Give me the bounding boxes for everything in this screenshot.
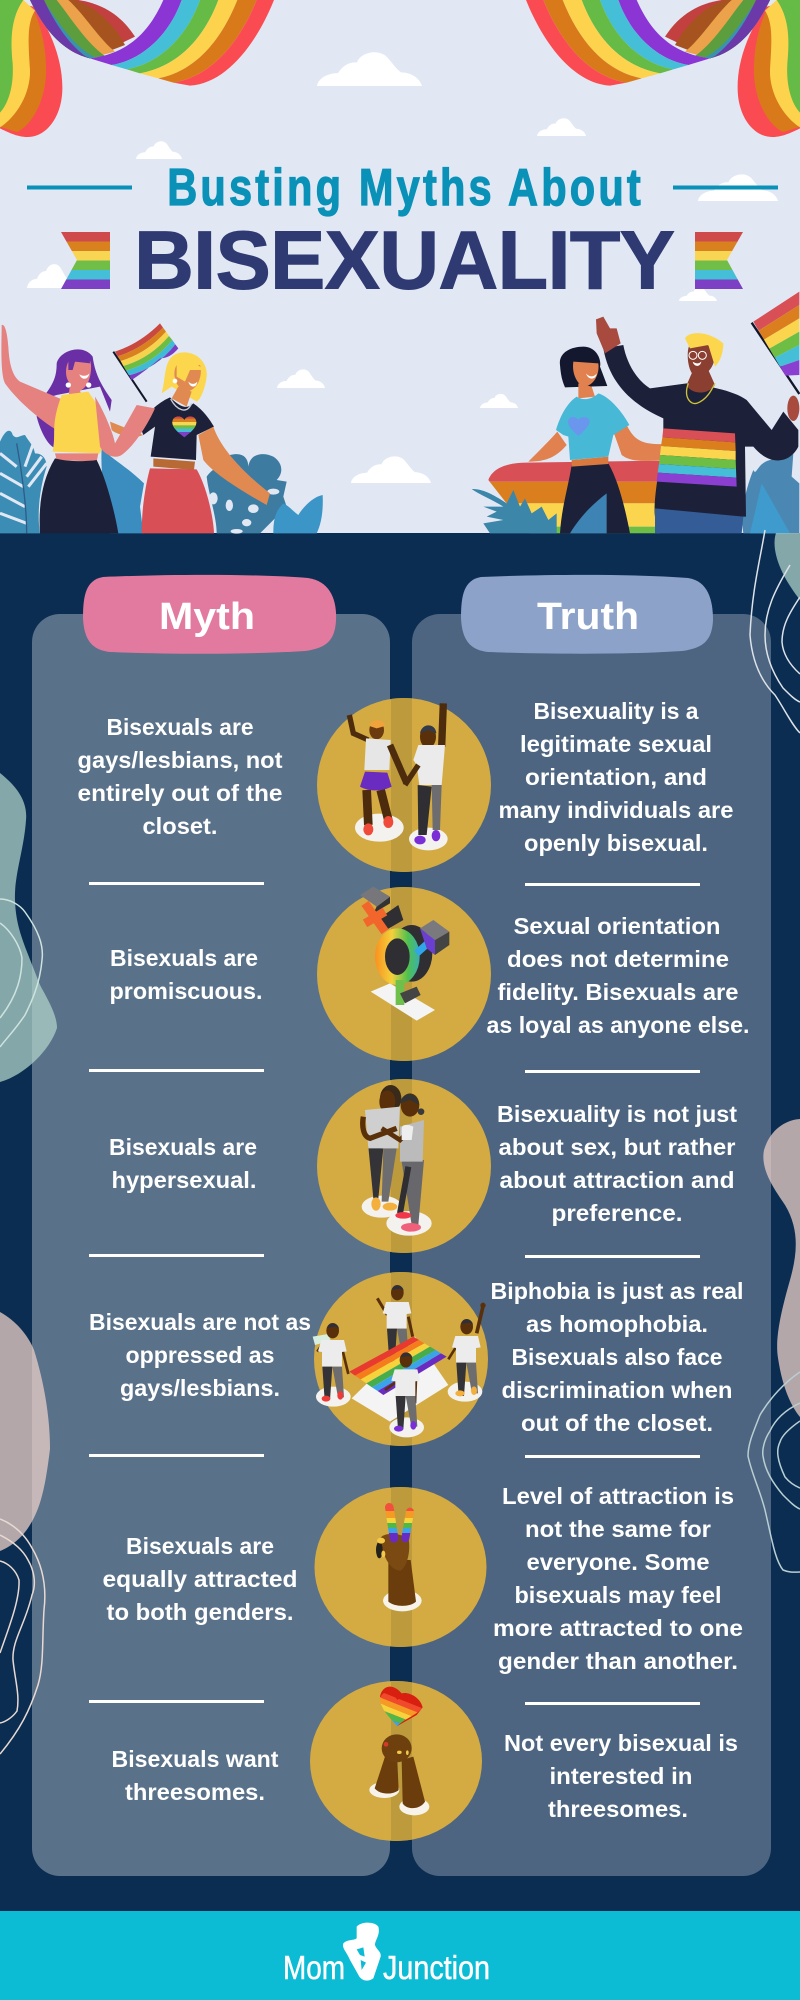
myth 6 text: threesomes. <box>125 1779 265 1805</box>
myth 1 text <box>78 714 283 839</box>
logo: MomJunction <box>283 1923 490 1986</box>
truth 1 text: Bisexuality is a <box>534 698 699 724</box>
myth 1 text: closet. <box>142 813 218 839</box>
icon circle 1: couple holding hands <box>317 698 491 872</box>
myth 2 text: Bisexuals are <box>110 945 258 971</box>
heading pill: Truth <box>461 575 713 654</box>
truth 2 text: fidelity. Bisexuals are <box>498 979 738 1005</box>
decorative blob: right grey <box>763 1119 800 1417</box>
decorative blob: left teal <box>0 773 57 1082</box>
illustration: couple with rainbow sweater and flag <box>472 292 799 535</box>
myth 4 text: Bisexuals are not as <box>89 1309 311 1335</box>
truth 1 text: many individuals are <box>498 797 734 823</box>
myth 2 text <box>110 945 262 1004</box>
decorative blob: right teal <box>775 533 800 600</box>
truth 3 text: Bisexuality is not just <box>497 1101 737 1127</box>
illustration: two women with flag and foliage <box>0 323 323 534</box>
panel: truth column <box>412 614 771 1876</box>
myth 1 text: Bisexuals are <box>106 714 254 740</box>
myth 5 text: equally attracted <box>102 1566 298 1592</box>
truth 3 text: about attraction and <box>500 1167 734 1193</box>
icon circle 2: rainbow gender symbol <box>317 887 491 1061</box>
logo: MomJunction: Junction <box>383 1949 490 1986</box>
myth 3 text <box>109 1134 257 1193</box>
truth 4 text: as homophobia. <box>526 1311 708 1337</box>
myth 3 text: Bisexuals are <box>109 1134 257 1160</box>
logo: MomJunction: Mom <box>283 1949 345 1986</box>
title: BISEXUALITY: BISEXUALITY <box>134 214 675 306</box>
truth 1 text: orientation, and <box>525 764 707 790</box>
clouds <box>27 52 778 483</box>
myth 3 text: hypersexual. <box>112 1167 256 1193</box>
truth 1 text <box>498 698 734 856</box>
truth 4 text: discrimination when <box>502 1377 732 1403</box>
truth 2 text <box>486 913 750 1038</box>
icon: right rainbow banner <box>695 232 743 290</box>
truth 5 text: gender than another. <box>498 1648 738 1674</box>
myth 6 text: Bisexuals want <box>112 1746 279 1772</box>
decorative blob: left grey <box>0 1312 50 1551</box>
rainbow ribbon: top left <box>0 0 274 137</box>
icon circle 5: peace sign hand with rainbow fingers <box>314 1487 486 1647</box>
icon circle 4: group with rainbow flag <box>313 1272 488 1446</box>
title: line decorations <box>27 186 778 190</box>
header background <box>0 0 800 534</box>
myth 6 text <box>112 1746 279 1805</box>
truth 2 text: Sexual orientation <box>514 913 720 939</box>
truth 5 text: bisexuals may feel <box>514 1582 722 1608</box>
footer band <box>0 1911 800 2000</box>
truth 4 text: out of the closet. <box>521 1410 713 1436</box>
heading pill: Myth: Myth <box>159 596 255 638</box>
icon circle 6: hands holding rainbow heart <box>310 1681 482 1841</box>
myth 4 text <box>89 1309 311 1401</box>
myth 4 text: gays/lesbians. <box>120 1375 280 1401</box>
heading pill: Myth <box>83 575 336 654</box>
panel: myth column <box>32 614 390 1876</box>
myth 4 text: oppressed as <box>126 1342 274 1368</box>
truth 5 text: more attracted to one <box>493 1615 743 1641</box>
truth 6 text: interested in <box>550 1763 692 1789</box>
myth 5 text: Bisexuals are <box>126 1533 274 1559</box>
truth 6 text: threesomes. <box>548 1796 688 1822</box>
myth 5 text: to both genders. <box>106 1599 294 1625</box>
decorative contour lines <box>0 530 800 1754</box>
icon circle 3: two people hugging <box>317 1079 491 1253</box>
truth 1 text: openly bisexual. <box>524 830 708 856</box>
title: Busting Myths About: Busting Myths About <box>167 158 641 216</box>
icon: left rainbow banner <box>61 232 110 290</box>
truth 2 text: as loyal as anyone else. <box>486 1012 750 1038</box>
myth 1 text: gays/lesbians, not <box>78 747 283 773</box>
truth 5 text: Level of attraction is <box>502 1483 734 1509</box>
dividers <box>89 882 700 1705</box>
truth 5 text: everyone. Some <box>526 1549 710 1575</box>
truth 4 text: Bisexuals also face <box>512 1344 722 1370</box>
truth 3 text: preference. <box>552 1200 682 1226</box>
rainbow ribbon: top right <box>526 0 800 137</box>
truth 2 text: does not determine <box>507 946 729 972</box>
truth 6 text: Not every bisexual is <box>504 1730 738 1756</box>
truth 1 text: legitimate sexual <box>520 731 712 757</box>
truth 6 text <box>504 1730 738 1822</box>
truth 4 text: Biphobia is just as real <box>490 1278 744 1304</box>
myth 2 text: promiscuous. <box>110 978 262 1004</box>
truth 3 text <box>497 1101 737 1226</box>
truth 4 text <box>490 1278 744 1436</box>
truth 5 text: not the same for <box>525 1516 711 1542</box>
main navy background <box>0 533 800 1912</box>
truth 5 text <box>493 1483 743 1674</box>
heading pill: Truth: Truth <box>537 596 639 638</box>
truth 3 text: about sex, but rather <box>498 1134 736 1160</box>
myth 5 text <box>102 1533 298 1625</box>
myth 1 text: entirely out of the <box>78 780 282 806</box>
